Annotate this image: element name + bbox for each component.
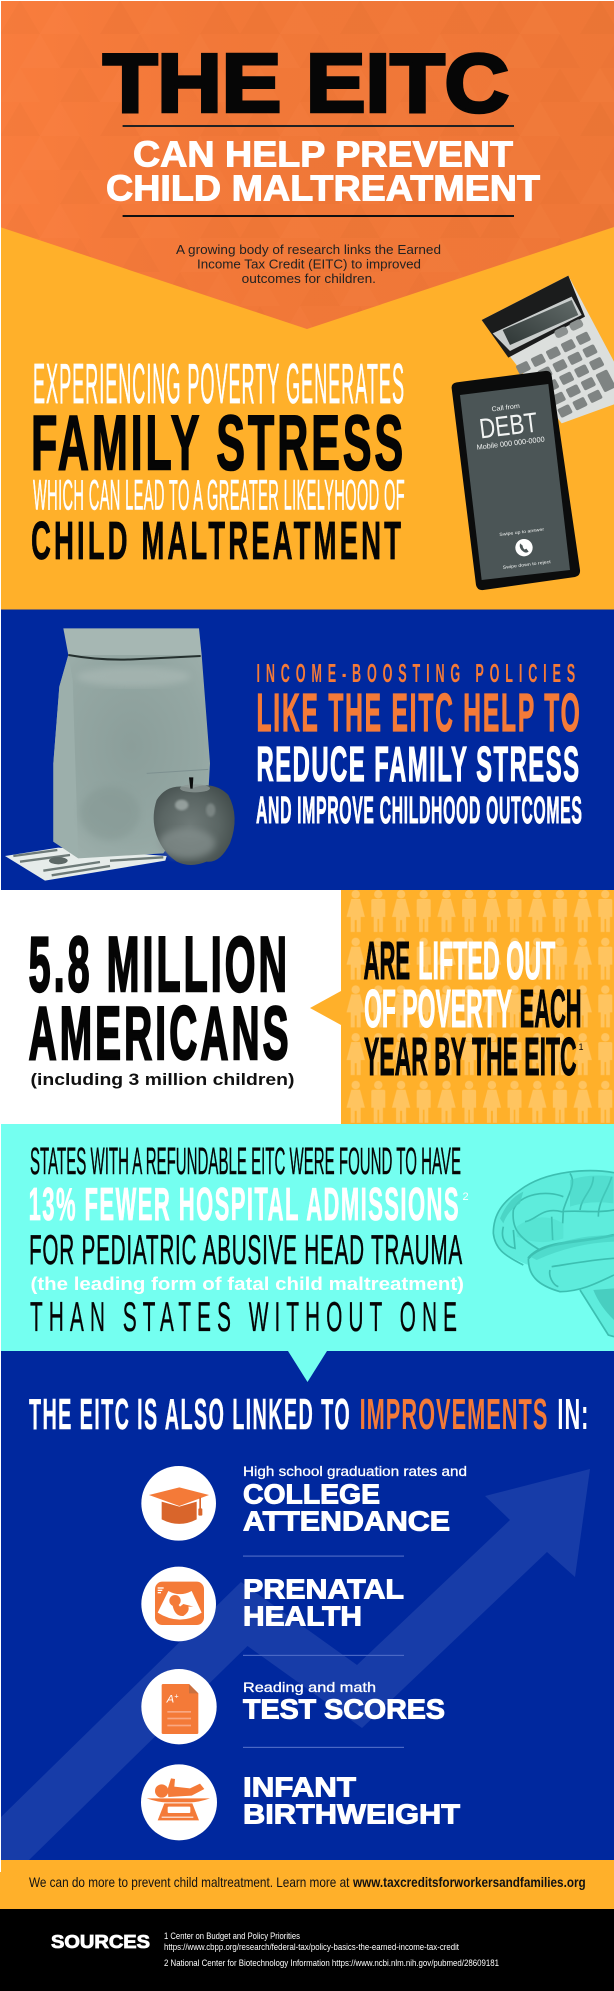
panel: lifted out of poverty — [310, 890, 614, 1124]
hospital admissions text: (the leading form of fatal child maltreatment) — [30, 1273, 464, 1294]
test scores text: TEST SCORES — [243, 1694, 445, 1724]
college attendance text: High school graduation rates and — [243, 1463, 467, 1479]
icon: graduation cap — [141, 1466, 216, 1541]
title: CHILD MALTREATMENT — [106, 168, 540, 208]
dollar bill — [5, 848, 167, 881]
panel: income-boosting policies — [0, 610, 614, 890]
intro text: A growing body of research links the Earned — [176, 242, 441, 257]
image: brain — [493, 1171, 614, 1337]
prenatal health text: HEALTH — [243, 1600, 362, 1632]
hospital admissions text — [29, 1141, 469, 1340]
college attendance text: COLLEGE — [243, 1478, 380, 1510]
sources footer — [0, 1909, 614, 1991]
panel: 5.8 million americans: AMERICANS — [29, 991, 292, 1075]
sources footer: 2 National Center for Biotechnology Information https://www.ncbi.nlm.nih.gov/pubmed/28609181 — [164, 1958, 499, 1969]
panel: improvements — [0, 1351, 614, 1860]
image: paper lunch bag, apple and dollar bill — [5, 628, 235, 881]
panel: 5.8 million americans: (including 3 million children) — [30, 1071, 294, 1089]
hospital admissions text: 2 — [462, 1191, 469, 1203]
bag — [53, 628, 210, 858]
test scores text: Reading and math — [243, 1679, 376, 1695]
arrow: rising background arrow — [0, 1469, 590, 1860]
infant birthweight text: BIRTHWEIGHT — [243, 1798, 460, 1830]
background: yellow stress panel — [0, 0, 614, 610]
icon: phone showing a debt call: Swipe down to reject — [502, 559, 552, 570]
panel: 5.8 million americans — [0, 890, 341, 1124]
infant birthweight text — [243, 1772, 460, 1830]
intro text: outcomes for children. — [242, 271, 376, 286]
apple — [154, 777, 235, 865]
icon: phone showing a debt call — [452, 371, 580, 590]
icon: calculator — [482, 276, 614, 425]
panel: hospital admissions — [0, 1124, 614, 1351]
title — [103, 36, 540, 217]
intro text — [176, 242, 441, 286]
panel: lifted out of poverty: 1 — [578, 1042, 584, 1052]
intro text: Income Tax Credit (EITC) to improved — [197, 256, 421, 272]
stress heading — [31, 352, 406, 571]
arrow: pointer from cyan panel — [288, 1351, 327, 1382]
icon: infant on scale — [141, 1764, 217, 1840]
title: CAN HELP PREVENT — [133, 134, 513, 174]
infant birthweight text: INFANT — [243, 1772, 356, 1802]
icon: phone showing a debt call: Mobile 000 000-0000 — [476, 435, 545, 452]
call to action band: We can do more to prevent child maltreatment. Learn more at — [29, 1874, 349, 1890]
panel: 5.8 million americans: 5.8 MILLION — [29, 920, 290, 1008]
sources footer: https://www.cbpp.org/research/federal-tax/policy-basics-the-earned-income-tax-credit — [164, 1942, 459, 1953]
header: orange chevron banner — [0, 0, 614, 329]
call to action band — [0, 1860, 614, 1909]
panel: lifted out of poverty: ARE — [364, 931, 410, 991]
icon: phone showing a debt call: DEBT — [478, 407, 539, 444]
title: THE EITC — [103, 36, 509, 130]
prenatal health text — [243, 1574, 404, 1632]
icon: test paper: + — [174, 1691, 179, 1700]
icon: test paper: A — [167, 1693, 174, 1705]
college attendance text: ATTENDANCE — [243, 1506, 450, 1536]
icon: ultrasound — [141, 1567, 216, 1641]
sources footer: SOURCES — [51, 1932, 150, 1952]
prenatal health text: PRENATAL — [243, 1574, 404, 1604]
college attendance text — [243, 1463, 467, 1536]
sources footer: 1 Center on Budget and Policy Priorities — [164, 1931, 300, 1942]
test scores text — [243, 1679, 445, 1724]
icon: phone showing a debt call: Swipe up to answer — [499, 527, 545, 537]
icon: phone showing a debt call: Call from — [491, 403, 521, 413]
icon: test paper — [141, 1669, 217, 1744]
policies text — [256, 658, 582, 832]
